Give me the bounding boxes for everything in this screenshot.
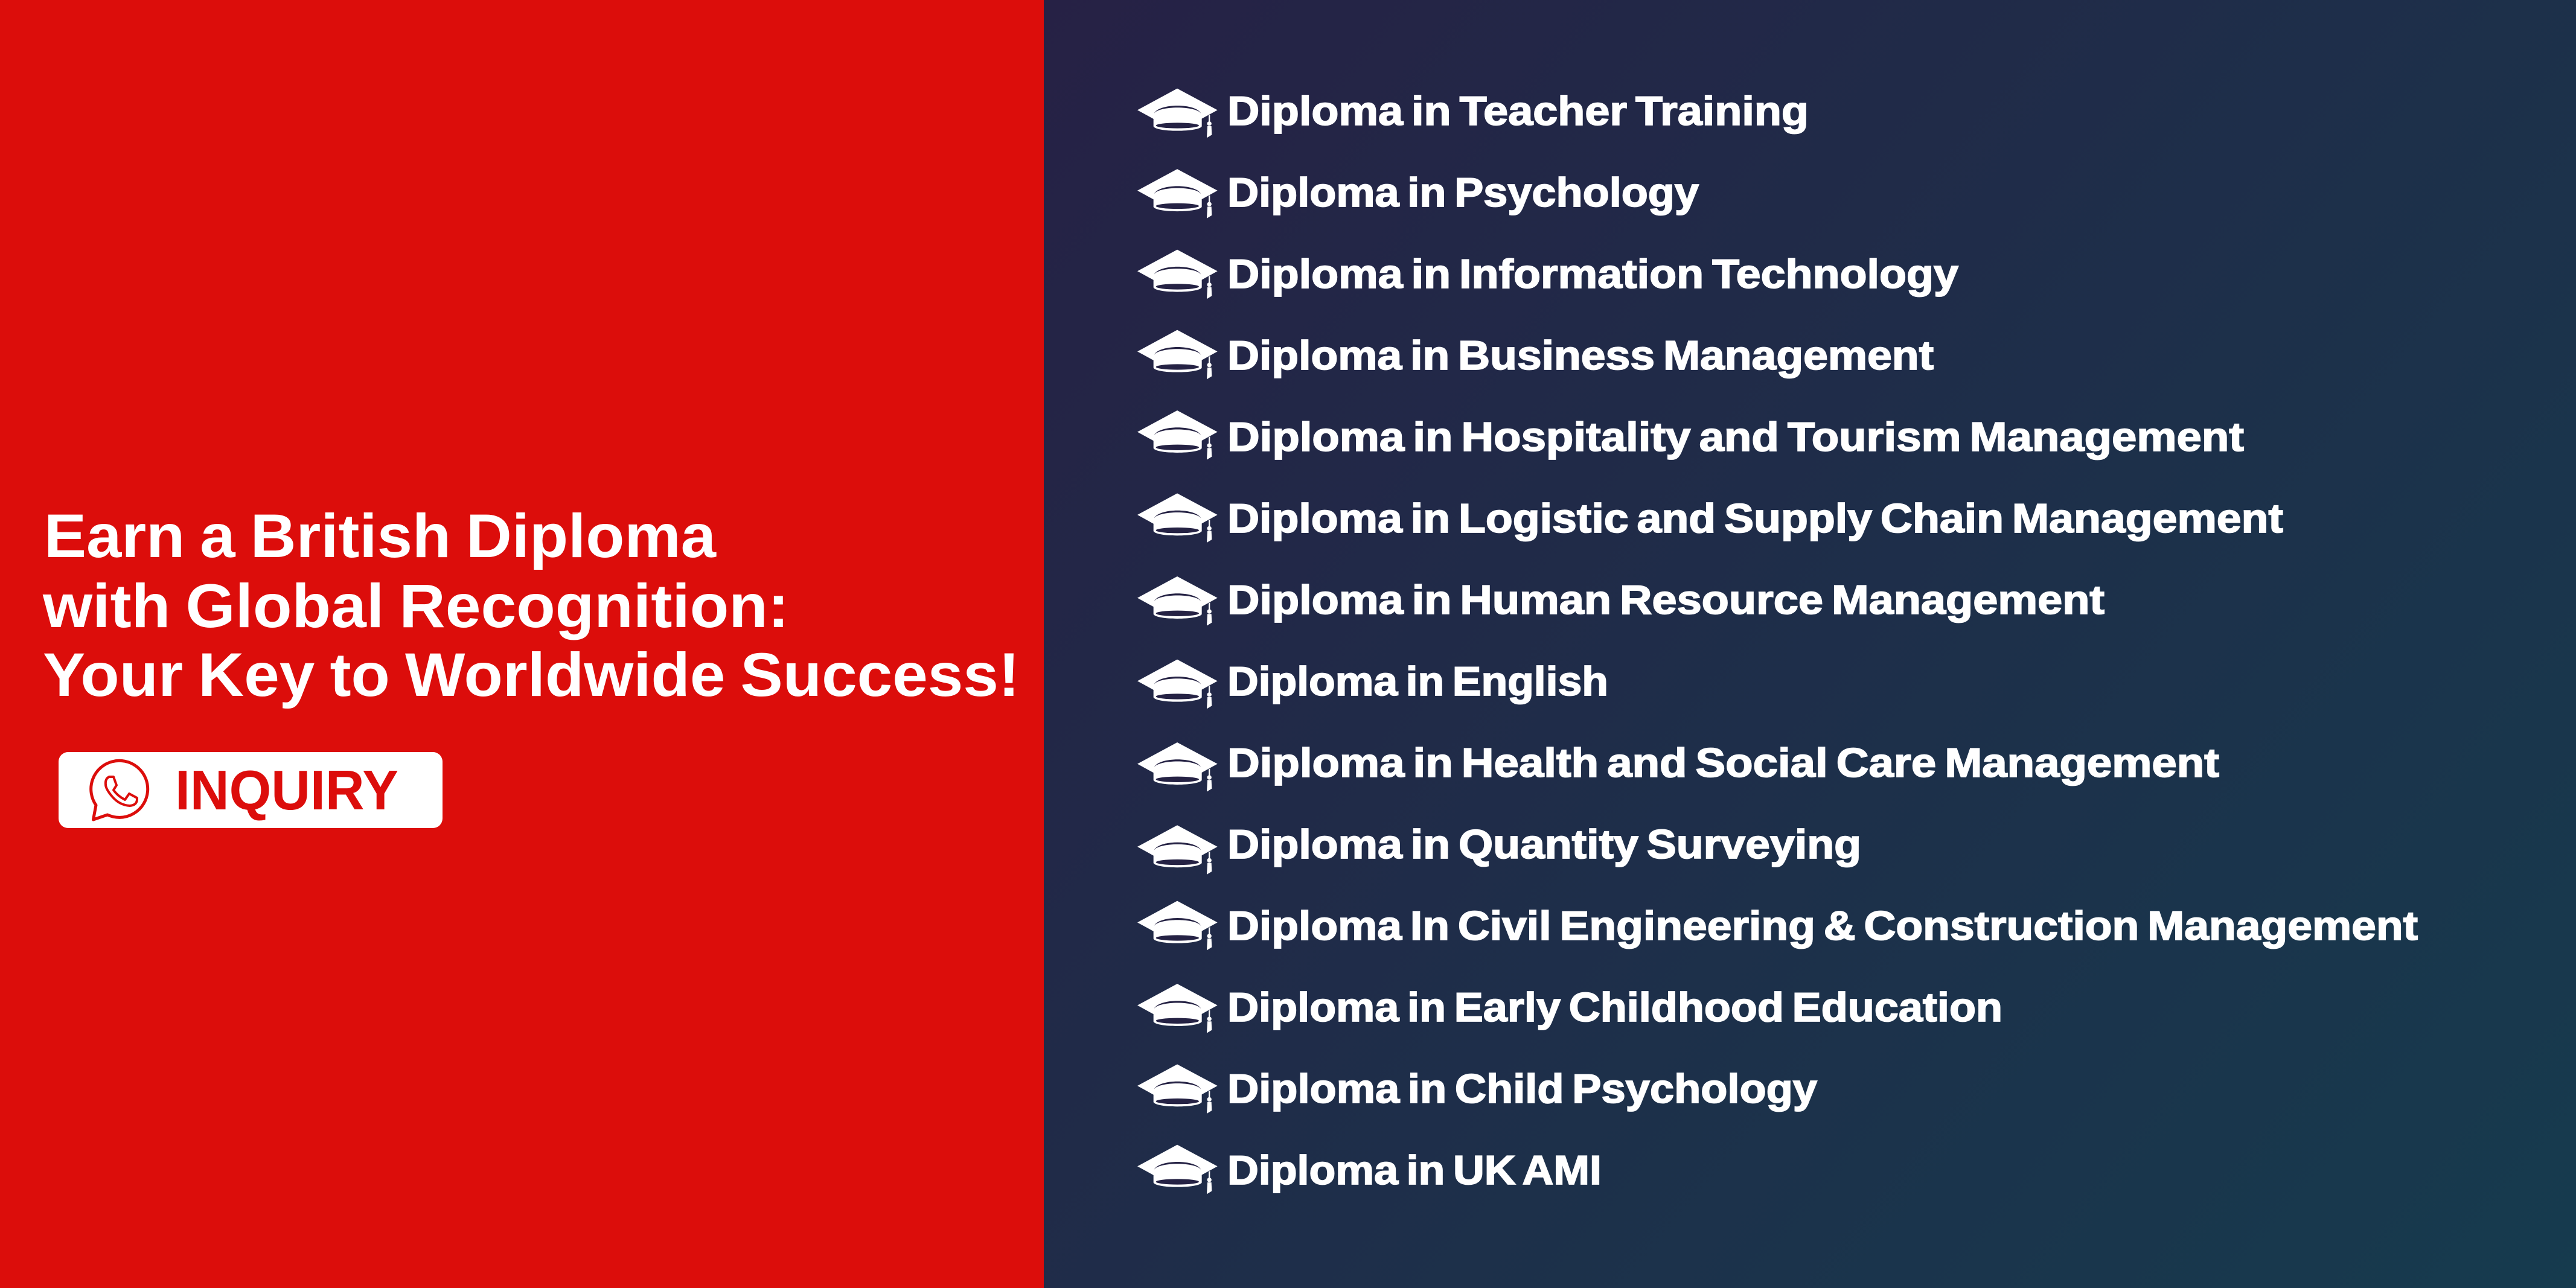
- panel: red left background: [0, 0, 1044, 1288]
- heading: title: Your Key to Worldwide Success!: [43, 640, 1020, 709]
- list item: UK AMI: Diploma in UK AMI: [1227, 1147, 1602, 1193]
- list item: English: Diploma in English: [1227, 658, 1608, 704]
- button: inquiry: [59, 752, 443, 828]
- heading: title: Earn a British Diploma: [44, 502, 717, 570]
- icon: whatsapp phone bubble: [91, 760, 148, 820]
- list item: Health and Social Care Management: Diploma in Health and Social Care Management: [1227, 740, 2219, 786]
- list item: Teacher Training: Diploma in Teacher Training: [1227, 88, 1809, 134]
- panel: dark gradient right background: [1044, 0, 2576, 1288]
- heading: title: [42, 502, 1020, 709]
- list item: Business Management: Diploma in Business Management: [1227, 333, 1934, 378]
- list item: Human Resource Management: Diploma in Human Resource Management: [1227, 577, 2105, 623]
- list item: Psychology: Diploma in Psychology: [1227, 170, 1699, 215]
- heading: title: with Global Recognition:: [42, 572, 789, 640]
- list item: Civil Engineering and Construction Management: Diploma In Civil Engineering & Construction Management: [1227, 903, 2418, 949]
- list item: Quantity Surveying: Diploma in Quantity Surveying: [1227, 821, 1861, 867]
- list item: Logistic and Supply Chain Management: Diploma in Logistic and Supply Chain Management: [1227, 496, 2283, 541]
- list item: Hospitality and Tourism Management: Diploma in Hospitality and Tourism Management: [1227, 414, 2244, 460]
- button label: INQUIRY: [175, 759, 398, 821]
- list item: Information Technology: Diploma in Information Technology: [1227, 251, 1958, 297]
- list: diplomas: [1137, 88, 2418, 1194]
- list item: Child Psychology: Diploma in Child Psychology: [1227, 1066, 1817, 1112]
- list item: Early Childhood Education: Diploma in Early Childhood Education: [1227, 984, 2002, 1030]
